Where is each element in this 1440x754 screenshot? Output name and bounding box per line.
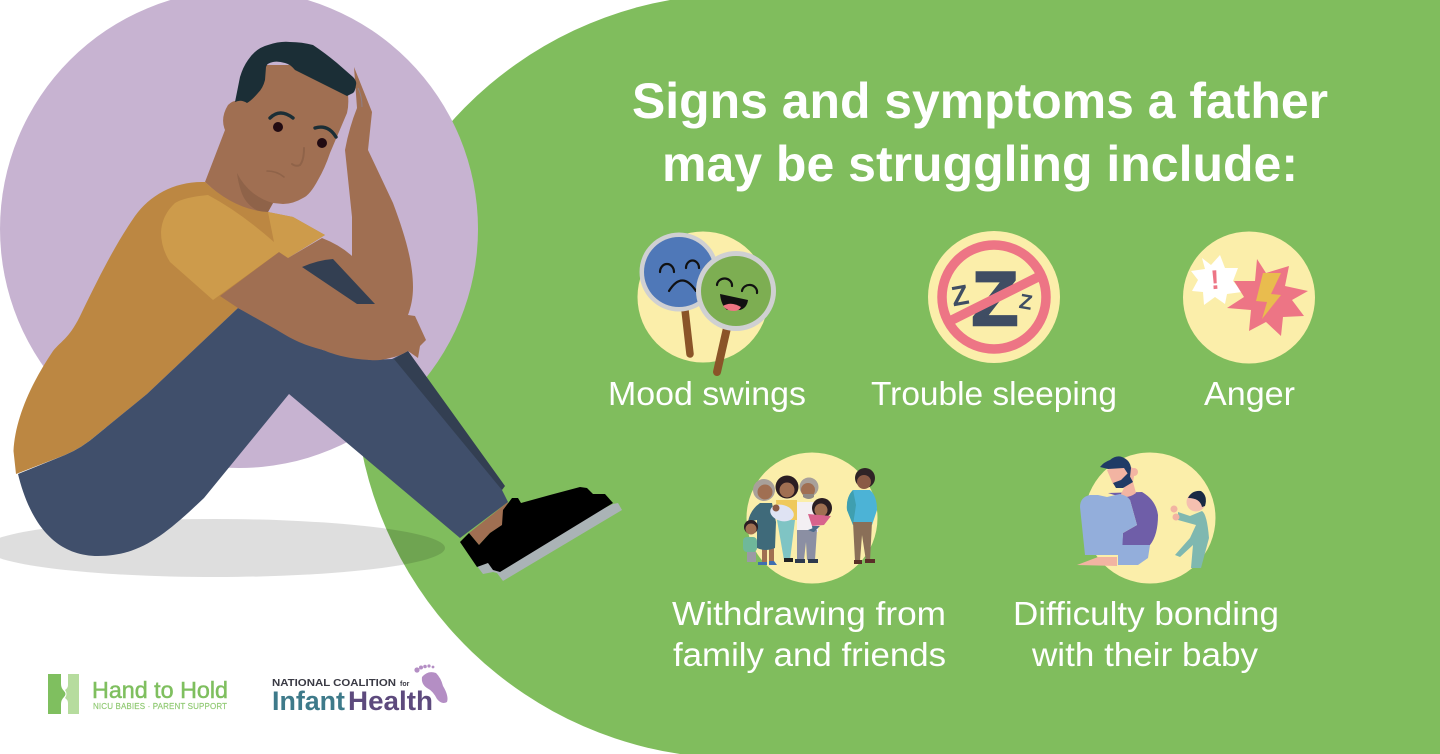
logo for: for <box>400 681 410 688</box>
icon backdrop <box>638 232 768 362</box>
shirt <box>14 182 325 474</box>
icon: sad and happy paddles <box>640 232 776 372</box>
ankle <box>469 502 508 545</box>
logo wordmark: Hand to Hold <box>92 677 228 703</box>
icon: crossed out Z's: Z <box>1017 290 1034 315</box>
trouser shadow strip <box>394 351 505 490</box>
shoe sole <box>477 503 622 581</box>
inner leg visible through arm <box>302 259 375 304</box>
icon backdrop <box>746 452 878 584</box>
logo Health: Health <box>348 686 433 716</box>
logo: Hand to Hold <box>48 674 228 714</box>
label <box>1013 595 1279 673</box>
icon: crossed out Z's: Z <box>949 279 971 312</box>
label <box>672 595 946 673</box>
logo: National Coalition for Infant Health <box>272 664 448 716</box>
icon: bursts and lightning: ! <box>1209 265 1221 295</box>
sleeve <box>161 195 325 300</box>
logo Infant: Infant <box>272 686 345 716</box>
logo tagline: NICU BABIES · PARENT SUPPORT <box>93 702 227 711</box>
label: family and friends <box>673 636 946 673</box>
symptom: mood swings <box>608 232 806 412</box>
icon: family group with man apart <box>743 468 877 565</box>
heading: may be struggling include: <box>662 136 1298 192</box>
eyes and eyebrows <box>270 113 336 148</box>
logo heading: NATIONAL COALITION <box>272 677 396 689</box>
label: with their baby <box>1031 636 1259 673</box>
symptom: anger <box>1183 232 1315 412</box>
icon: father and reaching baby <box>1077 456 1209 568</box>
green panel <box>354 0 1440 754</box>
finger detail <box>358 88 362 107</box>
heading <box>632 73 1328 192</box>
ground shadow <box>0 519 445 577</box>
head and neck <box>205 65 348 214</box>
icon backdrop <box>1084 452 1216 584</box>
label: Trouble sleeping <box>871 375 1117 412</box>
nose and mouth <box>267 148 304 177</box>
symptom: trouble sleeping <box>871 231 1117 412</box>
icon backdrop <box>1183 232 1315 364</box>
label: Anger <box>1204 375 1295 412</box>
symptom: difficulty bonding with their baby <box>1013 452 1279 673</box>
icon: crossed out Z's: Z <box>972 257 1018 342</box>
label: Mood swings <box>608 375 806 412</box>
purple circle behind figure <box>0 0 478 468</box>
logo mark <box>48 674 66 714</box>
arm and hand <box>220 67 426 360</box>
logo mark light half <box>65 674 79 714</box>
hair <box>235 42 356 103</box>
symptom: withdrawing from family and friends <box>672 452 946 673</box>
icon: footprint <box>414 664 448 703</box>
heading: Signs and symptoms a father <box>632 73 1328 129</box>
shoe <box>460 487 613 572</box>
icon: bursts and lightning <box>1191 255 1308 336</box>
trousers <box>18 308 508 556</box>
icon: crossed out Z's <box>942 245 1046 349</box>
jaw shadow <box>237 173 273 213</box>
label: Difficulty bonding <box>1013 595 1279 632</box>
label: Withdrawing from <box>672 595 946 632</box>
icon backdrop <box>928 231 1060 363</box>
illustration: seated father <box>14 42 622 581</box>
